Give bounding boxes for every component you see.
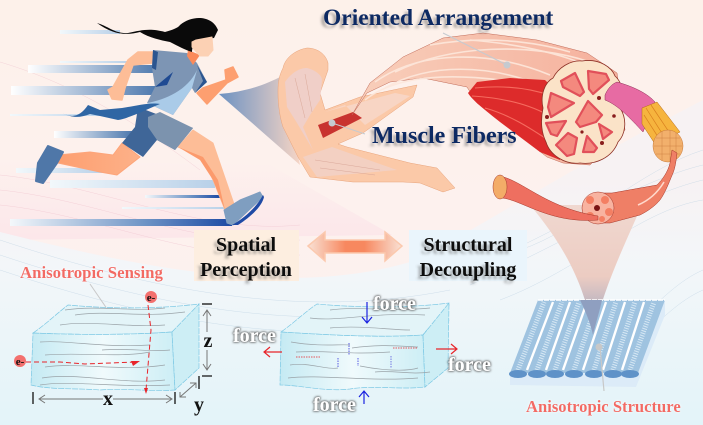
- decoupling block: [280, 303, 449, 390]
- electron top: [145, 291, 157, 304]
- single fibre: [493, 175, 598, 220]
- dimension ticks: [33, 304, 212, 404]
- back arm: [108, 52, 153, 100]
- axis label y: y: [194, 394, 204, 416]
- double arrow: [308, 232, 402, 261]
- dimension axes: [39, 310, 211, 403]
- funnel tip over structure: [580, 300, 602, 335]
- panel: structural decoupling: [409, 230, 527, 281]
- yellow fibres: [642, 102, 680, 144]
- force label bottom: force: [313, 394, 356, 416]
- long muscle bundle: [352, 33, 625, 165]
- bundle end: [653, 130, 683, 162]
- shirt: [147, 50, 207, 115]
- hair: [97, 18, 218, 52]
- label: anisotropic sensing: Anisotropic Sensing: [20, 263, 163, 282]
- force label right: force: [448, 354, 491, 376]
- axis label x: x: [103, 388, 113, 410]
- electron left: [14, 355, 26, 368]
- force arrows: [264, 302, 457, 404]
- axis label z: z: [204, 330, 213, 352]
- force label left: force: [233, 325, 276, 347]
- face: [192, 37, 213, 56]
- heading: muscle fibers: Muscle Fibers: [372, 123, 517, 149]
- front shoe: [224, 192, 263, 225]
- sensing block: [14, 291, 199, 394]
- current path: vertical: [146, 305, 151, 390]
- back shoe: [36, 146, 63, 183]
- panel: structural decoupling: Structural: [424, 234, 513, 256]
- pointer: muscle fibers: [328, 120, 365, 134]
- fibre bundle: [582, 150, 677, 224]
- shorts: [122, 107, 193, 157]
- front leg shade: [178, 147, 225, 210]
- current path: horizontal: [26, 362, 135, 364]
- funnel: fibre to structure: [530, 205, 642, 335]
- arm anatomy: [278, 48, 455, 192]
- panel: structural decoupling: Decoupling: [420, 259, 516, 281]
- force label top: force: [373, 293, 416, 315]
- pointer: structure: [596, 344, 604, 391]
- pointer: sensing: [90, 284, 118, 324]
- speed lines: [10, 30, 232, 226]
- pink sheath: [605, 82, 655, 132]
- back leg: [58, 143, 140, 175]
- front arm and hand: [197, 67, 238, 104]
- pointer: oriented arrangement: [443, 33, 510, 68]
- front leg: [178, 130, 235, 210]
- anisotropic structure: [509, 300, 665, 387]
- label: anisotropic structure: Anisotropic Structure: [526, 397, 681, 416]
- runner figure: [36, 18, 264, 225]
- ribbon: [62, 103, 160, 120]
- panel: spatial perception: Perception: [200, 259, 292, 281]
- cross section: [541, 60, 625, 163]
- exposed red fibres: [318, 112, 362, 138]
- panel: spatial perception: [194, 230, 299, 281]
- red fascicles: [468, 78, 565, 160]
- electron left: e-: [16, 356, 25, 368]
- funnel: runner to arm: [219, 76, 300, 165]
- neck: [187, 50, 200, 65]
- heading: oriented arrangement: Oriented Arrangement: [323, 5, 554, 31]
- panel: spatial perception: Spatial: [216, 234, 276, 256]
- electron top: e-: [147, 292, 156, 304]
